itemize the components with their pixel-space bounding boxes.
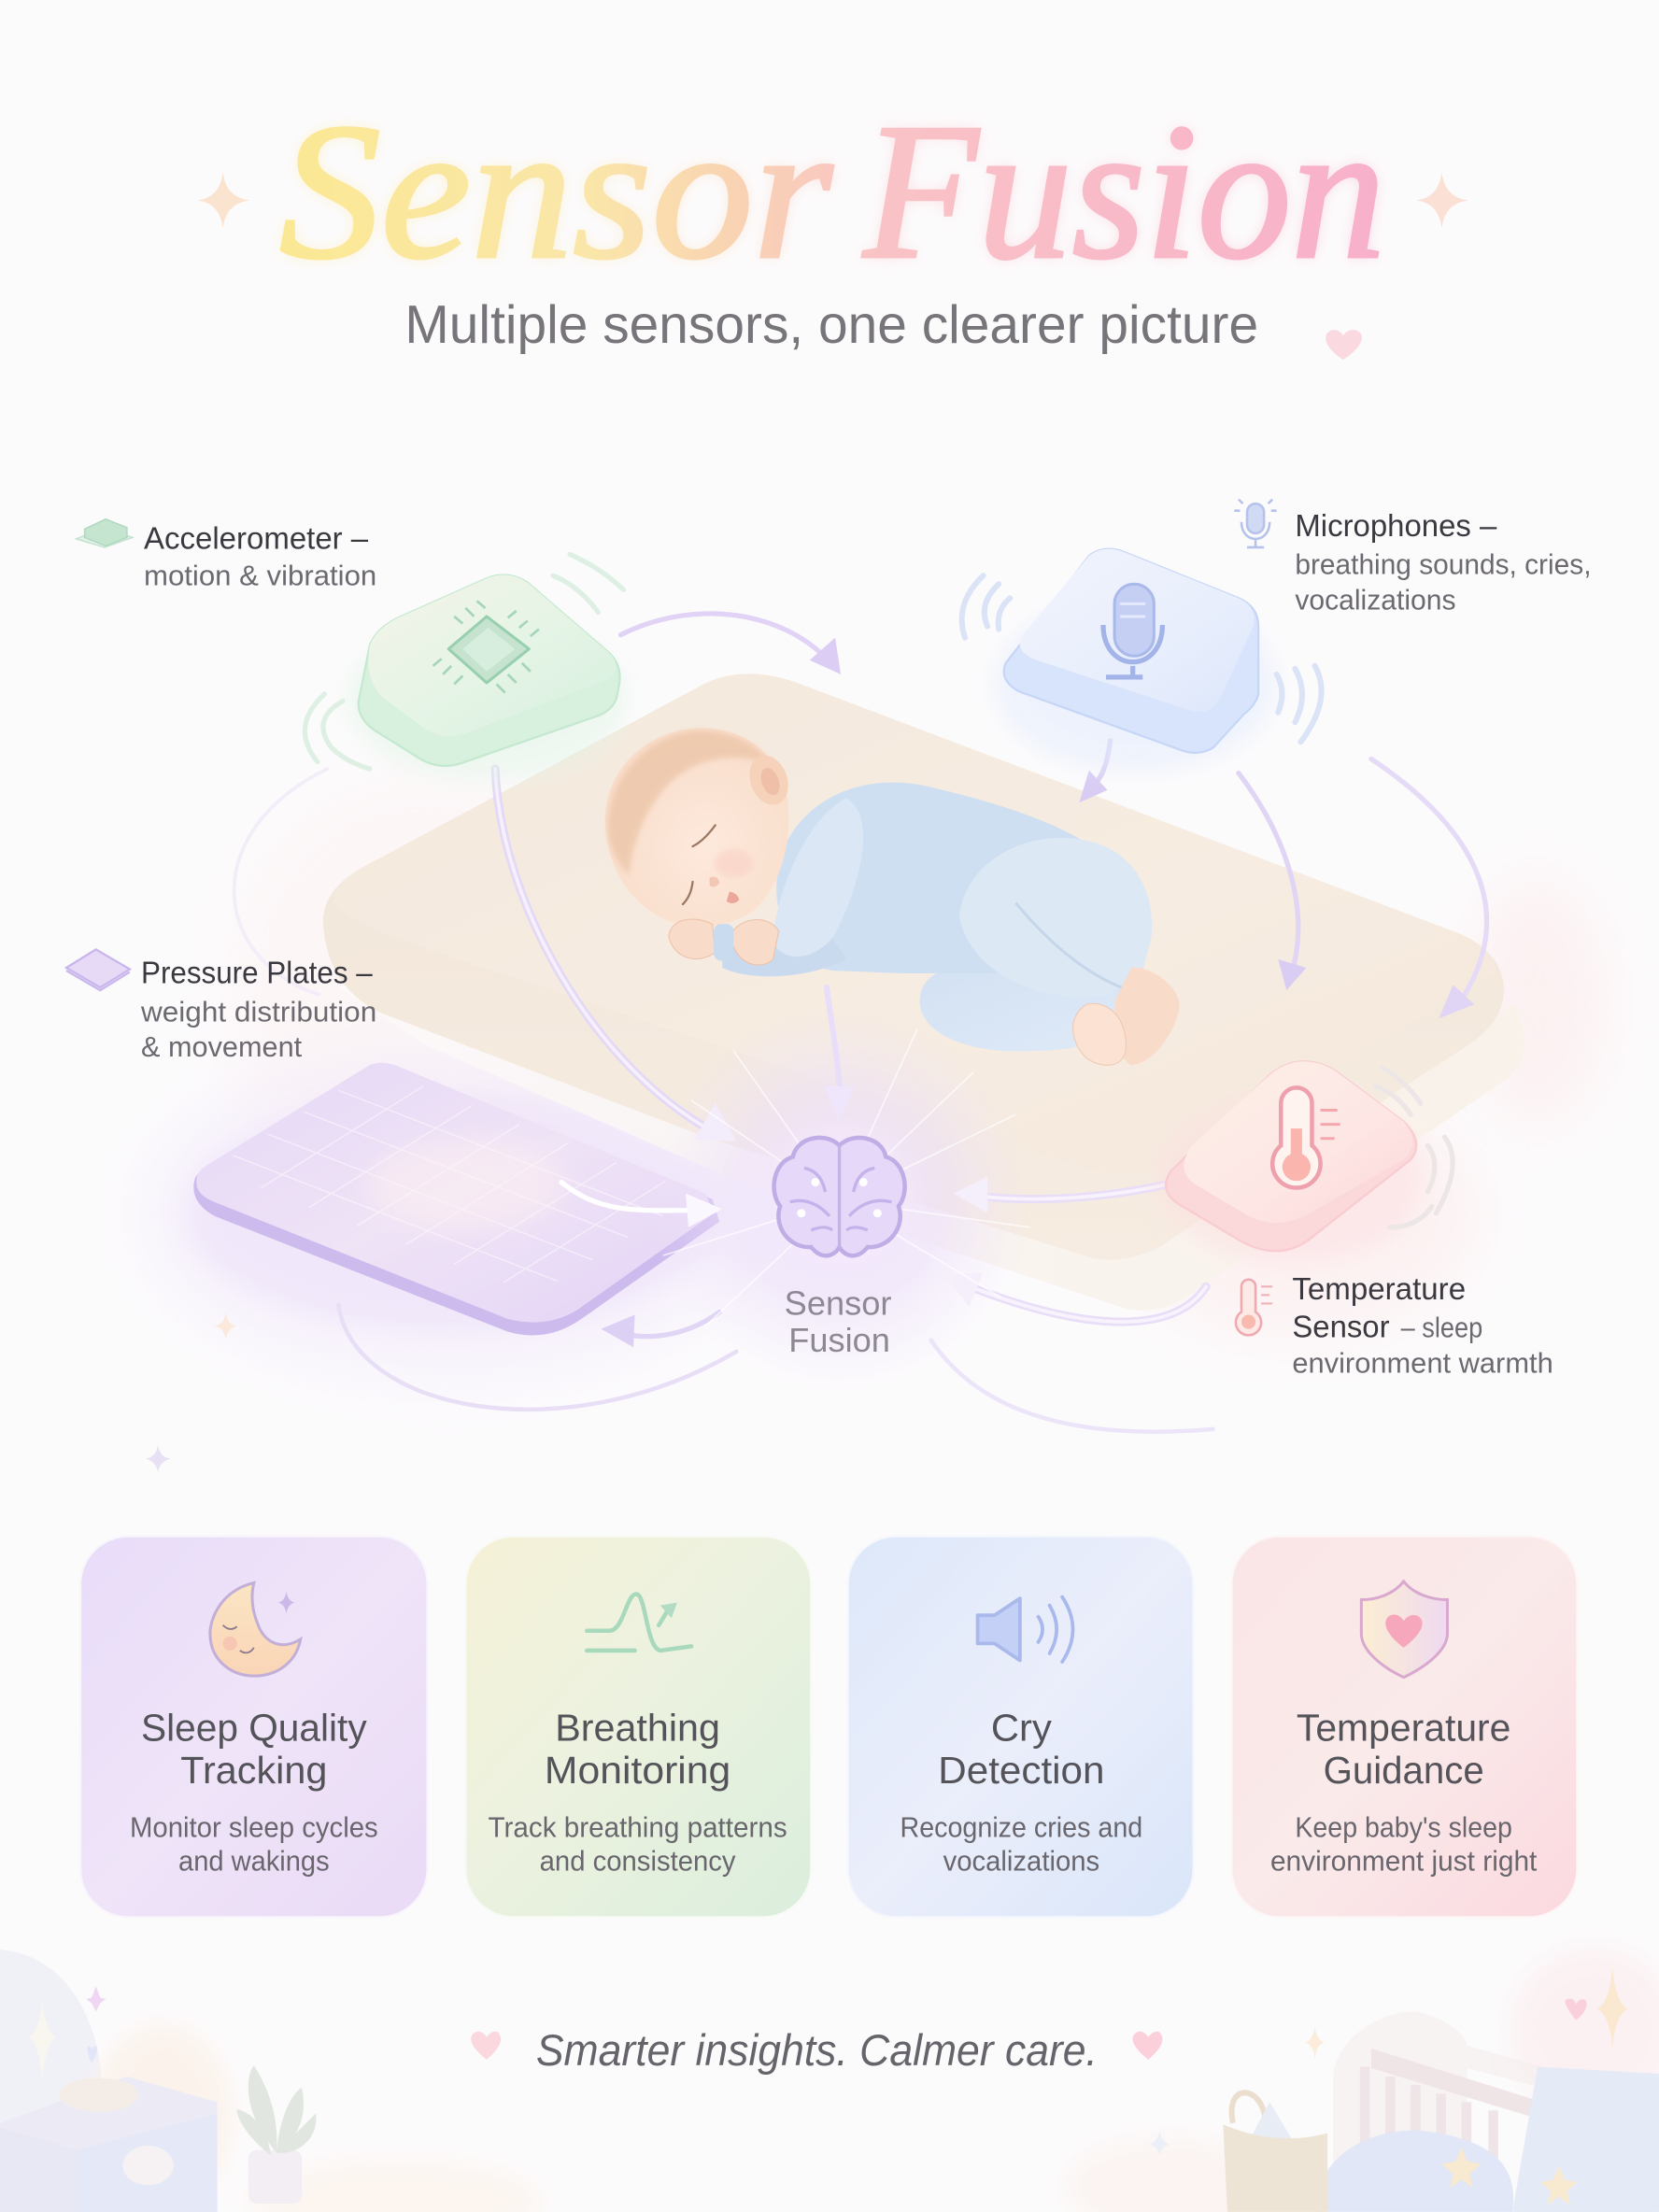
label: temperature sensor: environment warmth [1292,1346,1553,1379]
head [605,728,788,927]
subtitle: Multiple sensors, one clearer picture [404,295,1258,355]
card: breathing monitoring: Track breathing patterns [489,1812,787,1843]
nursery scene: right [1065,1947,1659,2212]
label: microphones: Microphones – [1295,509,1497,544]
label: sensor fusion: Sensor [785,1284,891,1323]
arrow: accelerometer to mattress top [620,614,841,674]
card: cry detection: Detection [938,1749,1104,1792]
brain: sensor fusion hub [663,1029,1029,1326]
arrow: brain to plate [601,1312,719,1347]
temperature sensor [1156,1061,1453,1263]
arrow: accelerometer to brain [495,769,736,1141]
title: Fusion [861,84,1385,300]
arrow: temperature lower [943,1272,1206,1322]
gift box [0,2077,218,2212]
plant [237,2065,317,2204]
card: cry detection [848,1537,1194,1917]
icon: left sparkle [197,172,249,229]
icon: mini plate [66,949,130,990]
icon: right sparkle [1416,172,1468,229]
card: temperature guidance [1231,1537,1577,1917]
hair [608,730,771,874]
hands [669,919,716,959]
card: temperature guidance: Keep baby's sleep [1295,1812,1512,1843]
title: Sensor [279,84,833,300]
icon: chip [433,601,539,693]
label: microphones: vocalizations [1295,583,1456,616]
heat waves [1375,1068,1453,1227]
icon: heart left [471,2032,501,2060]
card: sleep quality tracking [80,1537,428,1917]
card: breathing monitoring: Breathing [555,1707,720,1750]
blanket [1312,2066,1659,2212]
arrow: center down [824,987,855,1122]
card: temperature guidance: Temperature [1297,1707,1510,1750]
icon: thermometer [1272,1087,1340,1188]
title: Sensor [279,84,833,300]
icon: moon [210,1582,301,1676]
tagline: Smarter insights. Calmer care. [536,2026,1098,2075]
label: temperature sensor: Sensor [1292,1311,1390,1345]
icon: heart right [1133,2032,1162,2060]
card: temperature guidance: Guidance [1324,1749,1484,1792]
card: breathing monitoring: Monitoring [545,1749,730,1792]
label: temperature sensor [1236,1272,1553,1379]
label: temperature sensor: Temperature [1292,1272,1466,1307]
thigh [959,838,1152,997]
label: accelerometer: motion & vibration [144,560,376,592]
arc: left faint [234,769,327,995]
label: pressure plates: weight distribution [140,995,376,1028]
label: accelerometer: Accelerometer – [144,521,369,556]
card: cry detection: Cry [991,1707,1052,1750]
sound waves [962,575,1322,742]
card: sleep quality tracking: Monitor sleep cycles [130,1812,378,1843]
label: sensor fusion: Fusion [788,1321,890,1359]
icon: mini thermometer [1236,1280,1272,1335]
mattress base [338,973,1524,1311]
arrows [234,614,1486,1432]
label: pressure plates: & movement [141,1030,303,1063]
pressure plate [183,1063,719,1335]
crib [1333,2011,1659,2212]
icon: speaker [978,1597,1073,1662]
card: sleep quality tracking: and wakings [178,1847,330,1878]
label: temperature sensor: – sleep [1401,1312,1482,1344]
basket [1223,2092,1327,2212]
arm [773,799,863,957]
label: microphones: breathing sounds, cries, [1295,548,1592,581]
arrow: far right [1371,759,1486,1018]
accelerometer sensor [305,555,628,780]
icon: accelerometer chip [77,519,133,547]
nose and mouth [710,877,719,886]
label: accelerometer [77,519,376,592]
card: sleep quality tracking: Tracking [180,1749,327,1792]
label: microphones [1234,500,1592,616]
torso and sleeve [776,783,1128,973]
title: Fusion [861,84,1385,300]
card: cry detection: Recognize cries and [900,1812,1142,1843]
vibration waves [305,555,624,769]
baby [605,728,1180,1065]
card: sleep quality tracking: Sleep Quality [141,1707,367,1750]
card: cry detection: vocalizations [943,1847,1099,1878]
title [279,84,1385,300]
lower sleeve [722,938,846,976]
microphone sensor [962,549,1322,772]
icon: microphone [1103,584,1162,677]
arc: lower right [931,1340,1213,1432]
icon: breathing wave [587,1595,691,1651]
label: sensor fusion [785,1284,891,1359]
arrow: mic long [1239,773,1306,990]
closed eyes [683,825,716,904]
icon: shield with heart [1361,1581,1447,1678]
icon: mini microphone [1234,500,1277,547]
card: breathing monitoring [465,1537,811,1917]
nursery scene: left [0,1950,543,2212]
arrow: pressure plate to brain [561,1183,722,1227]
arc: lower left [338,1305,736,1410]
label: pressure plates: Pressure Plates – [141,957,373,991]
brain glow [649,1010,1029,1391]
ear [743,750,795,810]
icon: heart [1326,330,1362,360]
mattress [323,674,1504,1260]
arrow: temperature to brain [954,1177,1164,1213]
decorative sparkles [146,1312,237,1473]
arrow: mic short [1079,741,1111,802]
card: breathing monitoring: and consistency [540,1847,736,1878]
lower leg [919,964,1145,1051]
label: pressure plates [66,949,376,1063]
feet [1114,968,1180,1065]
card: temperature guidance: environment just right [1270,1847,1538,1878]
